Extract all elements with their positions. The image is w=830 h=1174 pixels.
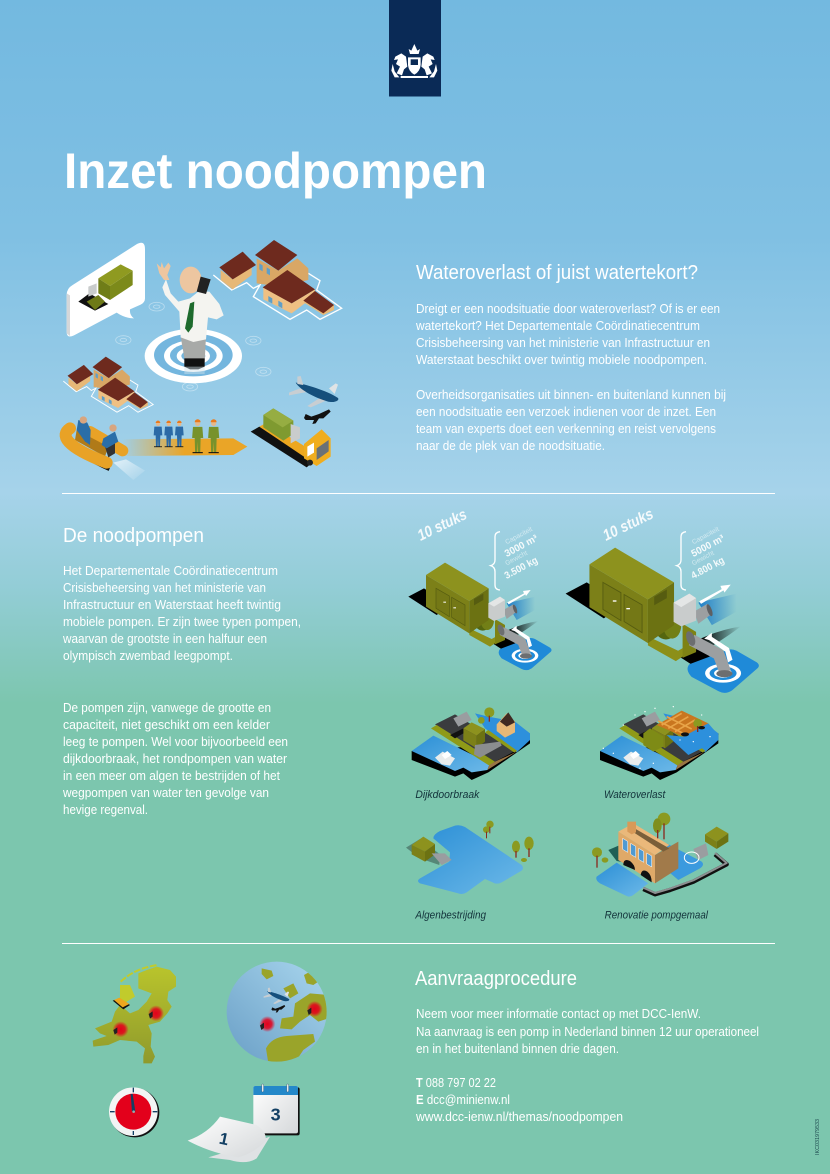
target rings and man on phone xyxy=(145,262,242,383)
intro text: watertekort? Het Departementale Coördinatiecentrum xyxy=(415,319,700,333)
contact details: www.dcc-ienw.nl/themas/noodpompen xyxy=(415,1110,623,1124)
scenarios xyxy=(406,706,728,922)
airplane xyxy=(289,376,338,424)
brace xyxy=(677,532,686,590)
capacity and weight: Gewicht xyxy=(691,550,716,567)
falling calendar page xyxy=(188,1117,270,1162)
houses left xyxy=(63,357,153,412)
heading: aanvraagprocedure: Aanvraagprocedure xyxy=(415,968,577,990)
rescue team xyxy=(154,419,219,453)
map: Netherlands xyxy=(93,965,176,1063)
capacity and weight: Gewicht xyxy=(504,550,529,567)
intro text: Dreigt er een noodsituatie door wateroverlast? Of is er een xyxy=(416,302,720,316)
procedure text xyxy=(416,1007,759,1056)
speech bubble with pump xyxy=(67,243,145,337)
intro text: Crisisbeheersing van het ministerie van Infrastructuur en xyxy=(416,336,710,350)
document code: IKC031979533 xyxy=(815,1119,821,1155)
procedure text: Na aanvraag is een pomp in Nederland binnen 12 uur operationeel xyxy=(416,1025,759,1039)
noodpompen text: dijkdoorbraak, het rondpompen van water xyxy=(63,752,287,766)
calendar: 3 xyxy=(271,1105,281,1125)
brace xyxy=(491,532,500,590)
intro text: team van experts doet een verkenning en reist vervolgens xyxy=(416,422,716,436)
noodpompen text: olympisch zwembad leegpompt. xyxy=(63,649,233,663)
label: Renovatie pompgemaal xyxy=(605,910,708,922)
noodpompen text: waarvan de grootste in een halfuur een xyxy=(62,632,267,646)
noodpompen text: hevige regenval. xyxy=(63,803,148,817)
capacity and weight: Capaciteit xyxy=(504,526,534,546)
noodpompen text: Infrastructuur en Waterstaat heeft twintig xyxy=(63,598,281,612)
scene: dijkdoorbraak xyxy=(412,707,530,780)
houses top right xyxy=(213,240,342,319)
orange arrow xyxy=(122,438,247,456)
intro text: naar de de plek van de noodsituatie. xyxy=(416,439,605,453)
scene: wateroverlast xyxy=(600,706,718,780)
clock xyxy=(109,1087,159,1137)
capacity and weight: Capaciteit xyxy=(691,526,721,546)
scene: algenbestrijding xyxy=(406,821,534,894)
truck with pump xyxy=(251,408,331,467)
noodpompen text xyxy=(62,564,301,817)
capacity and weight: 5000 m³ xyxy=(690,533,727,560)
noodpompen text: Het Departementale Coördinatiecentrum xyxy=(63,564,278,578)
label: Dijkdoorbraak xyxy=(415,789,480,801)
label 10 stuks: 10 stuks xyxy=(600,506,657,545)
calendar xyxy=(253,1084,300,1135)
contact details: E dcc@minienw.nl xyxy=(416,1093,510,1107)
globe xyxy=(227,962,328,1063)
falling calendar page: 1 xyxy=(218,1129,231,1149)
noodpompen text: in een meer om algen te bestrijden of het xyxy=(63,769,280,783)
capacity and weight: 3.500 kg xyxy=(503,555,540,582)
pump type 2: 5000 m3 xyxy=(566,506,759,693)
label: Wateroverlast xyxy=(604,789,666,801)
pump type 1: 3000 m3 xyxy=(408,506,552,670)
scene: renovatie pompgemaal xyxy=(592,813,728,897)
maps, clock and calendar xyxy=(93,962,328,1162)
heading: de noodpompen: De noodpompen xyxy=(63,525,204,547)
intro text: een noodsituatie een verzoek indienen voor de inzet. Een xyxy=(416,405,716,419)
intro text: Overheidsorganisaties uit binnen- en buitenland kunnen bij xyxy=(416,388,726,402)
title: Inzet noodpompen xyxy=(64,143,487,199)
logo: Rijksoverheid crest xyxy=(389,0,441,96)
intro text xyxy=(415,302,726,453)
inflatable boat xyxy=(66,416,145,480)
illustration: emergency coordinator and deployment xyxy=(63,240,342,480)
label: Algenbestrijding xyxy=(414,910,487,922)
noodpompen text: wegpompen van water ten gevolge van xyxy=(62,786,269,800)
signal markers xyxy=(116,302,271,391)
procedure text: en in het buitenland binnen drie dagen. xyxy=(416,1042,619,1056)
capacity and weight: 3000 m³ xyxy=(503,533,540,560)
contact details: T 088 797 02 22 xyxy=(416,1076,496,1090)
capacity and weight xyxy=(677,526,736,582)
noodpompen text: De pompen zijn, vanwege de grootte en xyxy=(63,701,271,715)
noodpompen text: Crisisbeheersing van het ministerie van xyxy=(63,581,266,595)
capacity and weight: 4.800 kg xyxy=(690,555,727,582)
capacity and weight xyxy=(490,526,550,582)
heading: wateroverlast: Wateroverlast of juist watertekort? xyxy=(416,262,698,284)
noodpompen text: leeg te pompen. Wel voor bijvoorbeeld een xyxy=(63,735,288,749)
intro text: Waterstaat beschikt over twintig mobiele noodpompen. xyxy=(416,353,707,367)
noodpompen text: capaciteit, niet geschikt om een kelder xyxy=(63,718,270,732)
noodpompen text: mobiele pompen. Er zijn twee typen pompen, xyxy=(63,615,301,629)
procedure text: Neem voor meer informatie contact op met DCC-IenW. xyxy=(416,1007,701,1021)
contact details xyxy=(415,1076,623,1124)
label 10 stuks: 10 stuks xyxy=(415,506,470,545)
